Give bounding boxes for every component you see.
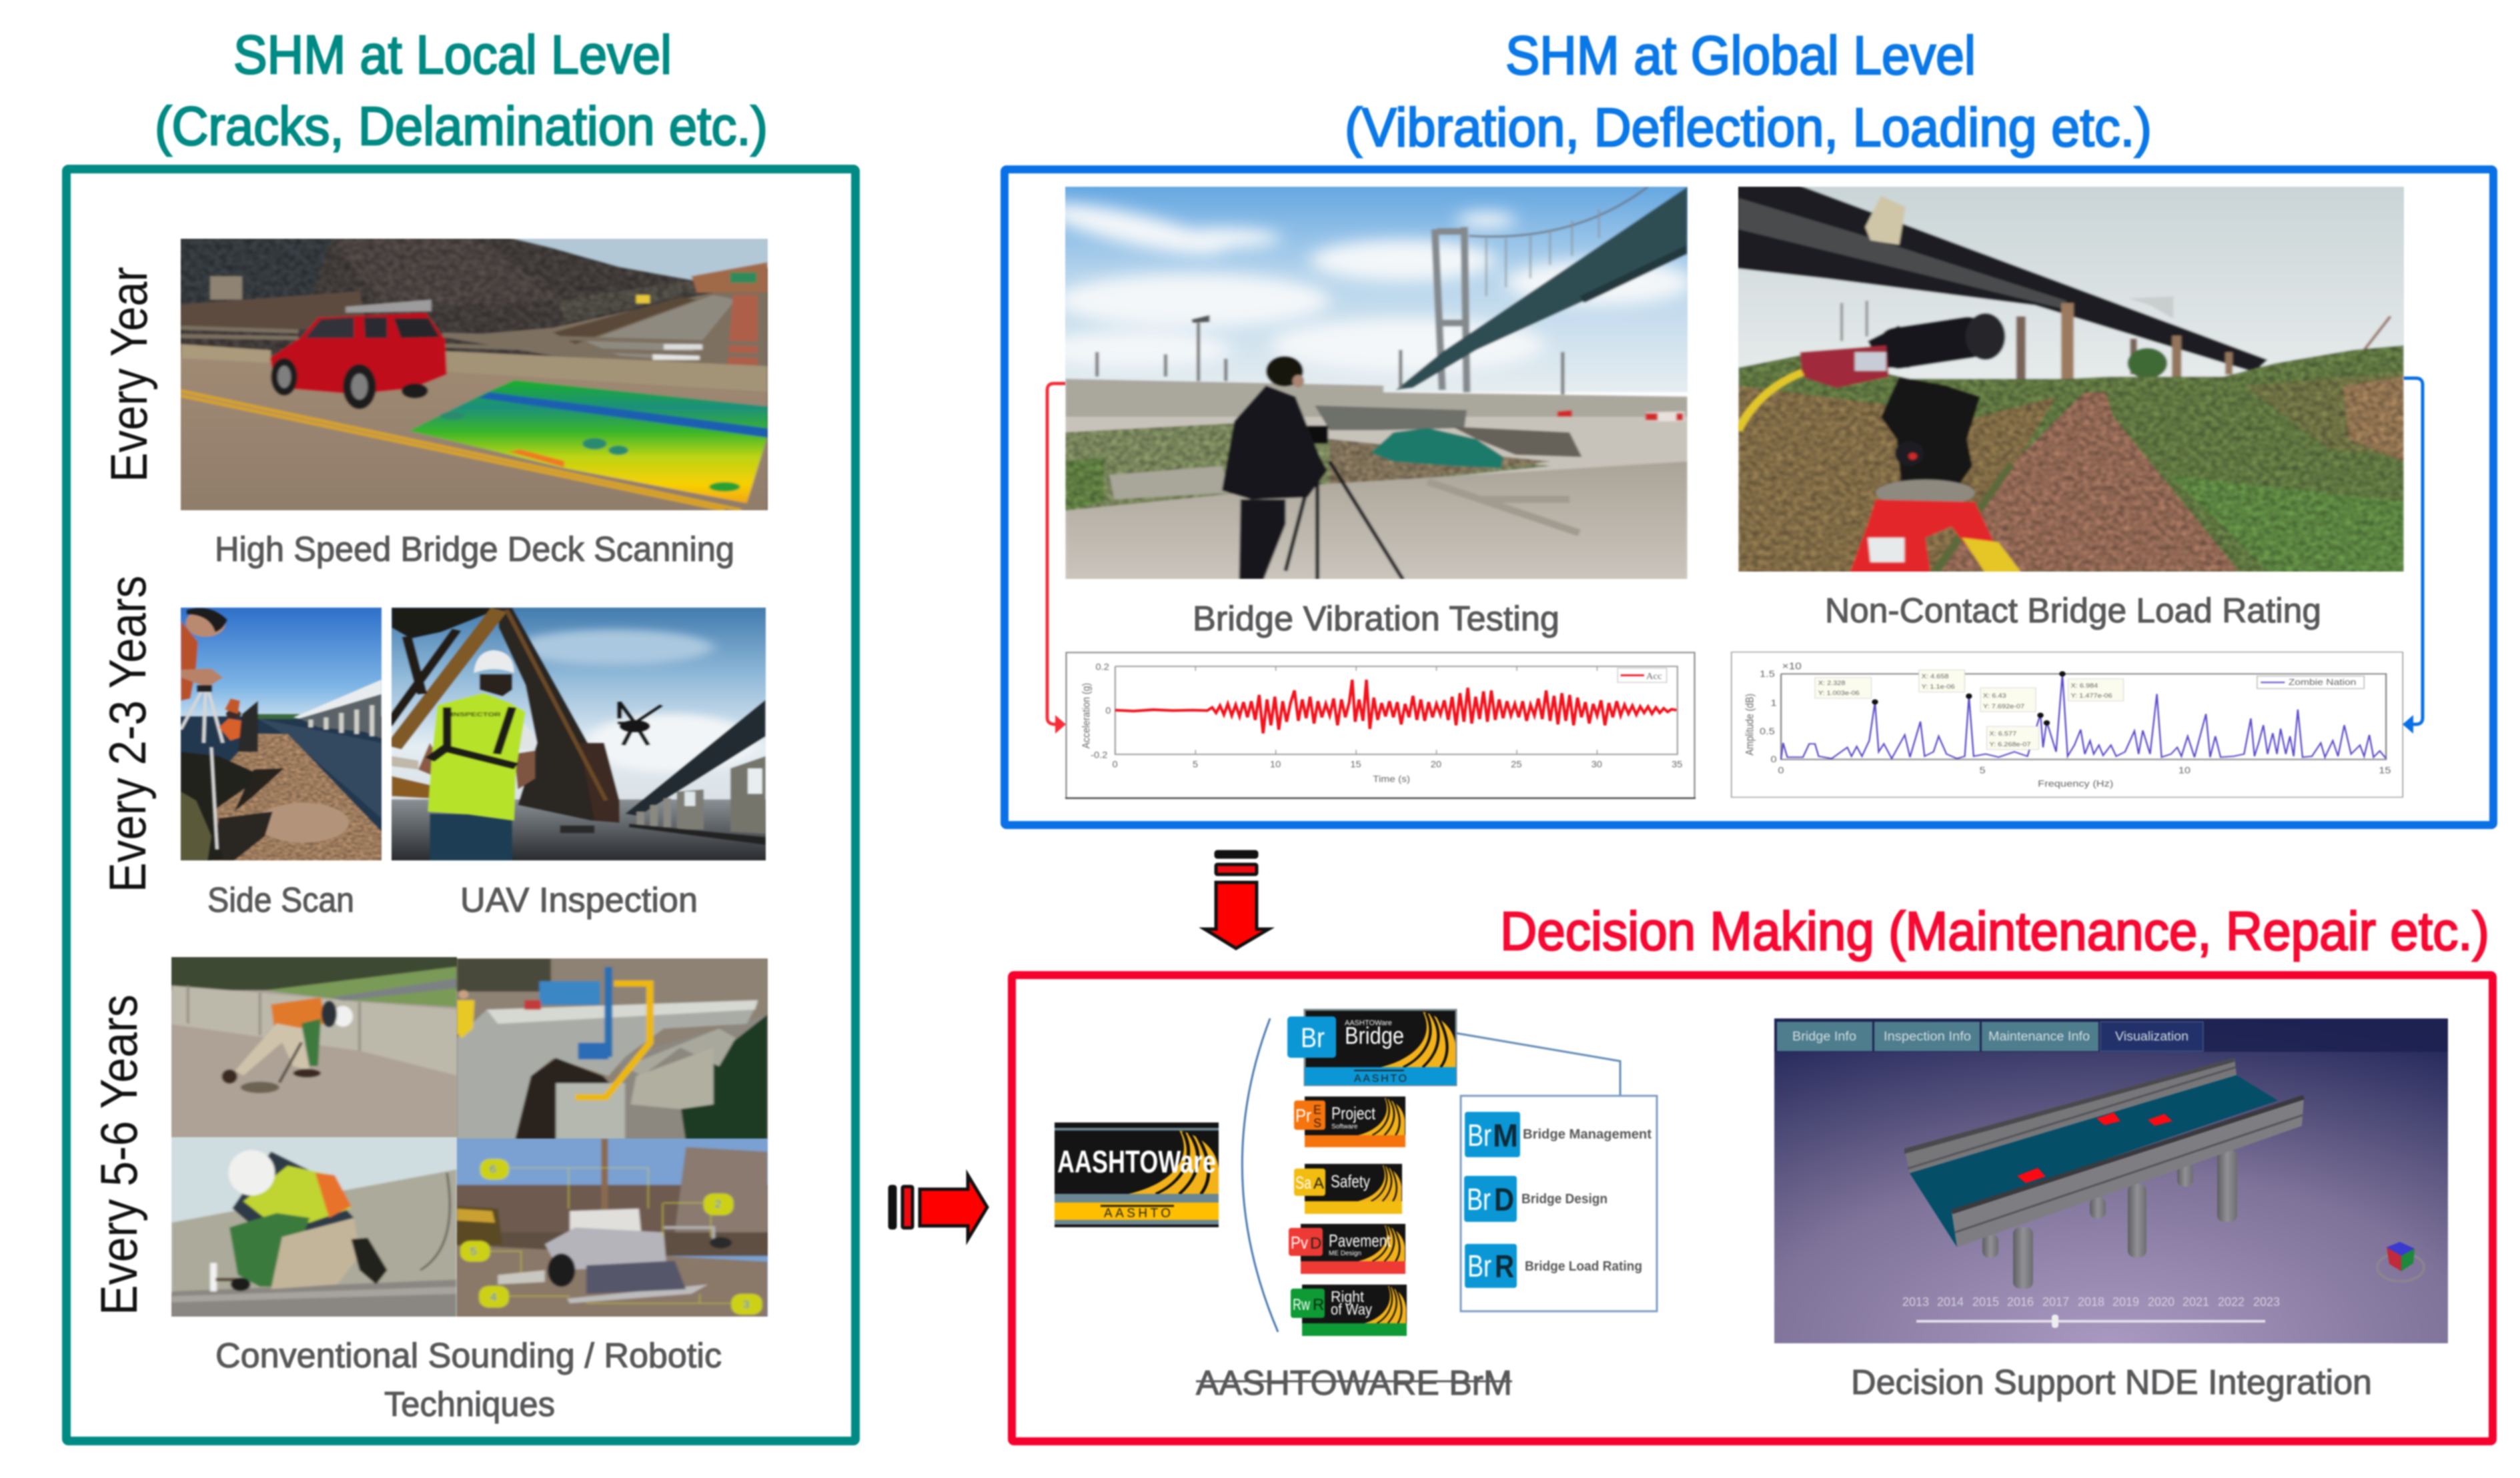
logo: Pavement ME Design: ME Design — [1329, 1250, 1361, 1257]
logo: AASHTOWare Bridge: Br — [1301, 1022, 1325, 1053]
logo: AASHTOWare — [1055, 1123, 1219, 1227]
caption: high speed bridge deck scanning: High Speed Bridge Deck Scanning — [215, 530, 734, 569]
chart: acceleration vs time — [1065, 651, 1697, 800]
chart: amplitude vs frequency: 0 — [1778, 765, 1784, 776]
chart: acceleration vs time: 20 — [1431, 759, 1441, 769]
chart: amplitude vs frequency: X: 2.328 — [1818, 680, 1846, 687]
photo: bridge under-deck inspection — [456, 957, 769, 1140]
tab bar — [1777, 1022, 2203, 1051]
logo: Right of Way: Rw — [1293, 1296, 1310, 1314]
module: Bridge Management — [1465, 1112, 1652, 1157]
logo: AASHTOWare Bridge: AASHTOWare — [1345, 1019, 1392, 1027]
year slider: 2016 — [2007, 1295, 2034, 1309]
tab bar: Bridge Info — [1792, 1030, 1856, 1044]
photo: sounding worker standing — [170, 956, 458, 1138]
year slider: 2021 — [2182, 1295, 2209, 1309]
module: Bridge Management: M — [1493, 1119, 1518, 1154]
chart: amplitude vs frequency: 1 — [1770, 698, 1777, 708]
logo: Project Estimator: Software — [1331, 1123, 1358, 1131]
logo: Project Estimator: S — [1313, 1117, 1321, 1130]
tab bar: Visualization — [2115, 1030, 2188, 1044]
caption: non-contact bridge load rating: Non-Contact Bridge Load Rating — [1825, 592, 2321, 630]
photo: high speed bridge deck scanning — [179, 237, 769, 512]
chart: acceleration vs time: -0.2 — [1091, 750, 1108, 760]
logo: Safety Analyst — [1294, 1164, 1402, 1214]
bridge 3D model — [1904, 1058, 2304, 1289]
chart: amplitude vs frequency: 10 — [2178, 765, 2190, 776]
caption: conventional sounding / robotic techniques: Techniques — [384, 1385, 555, 1424]
chart: acceleration vs time: 0.2 — [1096, 662, 1109, 672]
heading: SHM at Global Level: SHM at Global Level — [1505, 25, 1976, 86]
photo: robotic NDE platform: 6 — [490, 1163, 496, 1175]
module: Bridge Load Rating: Br — [1467, 1249, 1491, 1283]
logo: Right of Way: of Way — [1331, 1301, 1372, 1318]
caption: conventional sounding / robotic techniques: Conventional Sounding / Robotic — [215, 1337, 722, 1375]
module: Bridge Load Rating: Bridge Load Rating — [1525, 1259, 1642, 1274]
photo: robotic NDE platform: 2 — [714, 1199, 722, 1210]
logo: Pavement ME Design: Pavement — [1329, 1231, 1391, 1251]
year slider — [1902, 1295, 2280, 1328]
year slider: 2014 — [1937, 1295, 1964, 1309]
logo: AASHTOWare: AASHTOWare — [1057, 1144, 1216, 1179]
heading: SHM at Global Level: (Vibration, Deflection, Loading etc.) — [1345, 97, 2152, 158]
connector: Bridge to modules — [1456, 1033, 1620, 1096]
chart: acceleration vs time: 10 — [1270, 759, 1281, 769]
chart: acceleration vs time: Acceleration (g) — [1081, 683, 1093, 748]
photo: robotic NDE platform: 4 — [490, 1291, 497, 1303]
chart: acceleration vs time: 35 — [1672, 759, 1683, 769]
chart: amplitude vs frequency: Y: 1.1e-06 — [1922, 684, 1955, 690]
panel: decision making — [1012, 975, 2493, 1441]
label: Every Year: Every Year — [99, 267, 158, 482]
year slider: 2018 — [2078, 1295, 2104, 1309]
chart: amplitude vs frequency: Y: 1.477e-06 — [2070, 692, 2112, 700]
logo: Safety Analyst: Sa — [1295, 1173, 1311, 1193]
logo: Project Estimator — [1294, 1096, 1405, 1147]
logo: Safety Analyst: Safety — [1331, 1171, 1370, 1191]
heading: SHM at Local Level: (Cracks, Delamination etc.) — [155, 96, 768, 157]
chart: acceleration vs time: 0 — [1112, 759, 1118, 769]
logo: Pavement ME Design — [1289, 1224, 1405, 1274]
chart: acceleration vs time: 30 — [1592, 759, 1602, 769]
chart: acceleration vs time: 5 — [1193, 759, 1198, 769]
photo: UAV inspection — [390, 606, 767, 862]
year slider: 2020 — [2148, 1295, 2174, 1309]
module: Bridge Load Rating — [1465, 1244, 1642, 1288]
tab bar: Inspection Info — [1884, 1030, 1971, 1044]
module: Bridge Design: Bridge Design — [1521, 1192, 1608, 1207]
logo: AASHTOWare Bridge: AASHTO — [1354, 1073, 1407, 1084]
tab bar: Maintenance Info — [1988, 1030, 2090, 1044]
chart: amplitude vs frequency — [1730, 651, 2404, 799]
chart: acceleration vs time: 15 — [1350, 759, 1361, 769]
photo: robotic NDE platform: 5 — [470, 1246, 477, 1257]
photo: bridge vibration testing — [1065, 185, 1689, 580]
chart: amplitude vs frequency: ×10 — [1782, 662, 1802, 672]
arrow: red connector from photo to acceleration chart — [1047, 384, 1066, 734]
panel: local level — [67, 169, 855, 1441]
arrow: down from global level to decision making — [1205, 852, 1269, 948]
year slider: 2017 — [2042, 1295, 2069, 1309]
heading: SHM at Global Level — [1345, 25, 2152, 158]
chart: amplitude vs frequency: 5 — [1980, 765, 1986, 776]
chart: acceleration vs time: 0 — [1105, 706, 1111, 716]
module: Bridge Management: Br — [1467, 1118, 1491, 1153]
chart: acceleration vs time: Acc — [1646, 671, 1662, 682]
chart: amplitude vs frequency: Amplitude (dB) — [1744, 694, 1756, 756]
module: Bridge Load Rating: R — [1495, 1249, 1514, 1285]
orientation cube — [2377, 1242, 2424, 1281]
label: Every 5-6 Years: Every 5-6 Years — [89, 994, 148, 1315]
logo: AASHTOWare: AASHTO — [1104, 1207, 1171, 1221]
year slider: 2013 — [1902, 1295, 1929, 1309]
chart: amplitude vs frequency: X: 6.577 — [1989, 731, 2017, 738]
logo: Right of Way — [1291, 1285, 1407, 1336]
chart: amplitude vs frequency: X: 6.43 — [1983, 692, 2006, 700]
label: Every 2-3 Years: Every 2-3 Years — [98, 576, 157, 892]
chart: amplitude vs frequency: Y: 6.268e-07 — [1989, 742, 2031, 748]
logo: Pavement ME Design: D — [1310, 1235, 1321, 1253]
box: BrM modules — [1461, 1096, 1657, 1311]
chart: amplitude vs frequency: Zombie Nation — [2289, 678, 2356, 688]
year slider: 2022 — [2218, 1295, 2245, 1309]
caption: conventional sounding / robotic techniques — [215, 1337, 722, 1424]
chart: acceleration vs time: Time (s) — [1373, 774, 1410, 784]
bracket curve — [1242, 1018, 1278, 1332]
year slider: 2015 — [1972, 1295, 1999, 1309]
chart: amplitude vs frequency: Y: 1.003e-06 — [1818, 690, 1860, 697]
logo: Right of Way: Right — [1331, 1288, 1365, 1305]
logo: AASHTOWare Bridge: Bridge — [1345, 1022, 1404, 1049]
chart: amplitude vs frequency: 15 — [2379, 765, 2391, 776]
chart: amplitude vs frequency: X: 6.984 — [2070, 683, 2098, 690]
photo: non-contact bridge load rating — [1737, 185, 2405, 573]
caption: side scan: Side Scan — [207, 881, 354, 920]
chart: amplitude vs frequency: 1.5 — [1760, 669, 1775, 680]
caption: bridge vibration testing: Bridge Vibration Testing — [1193, 600, 1559, 638]
chart: amplitude vs frequency: X: 4.658 — [1922, 674, 1949, 680]
caption: UAV inspection: UAV Inspection — [460, 881, 698, 920]
chart: acceleration vs time: 25 — [1511, 759, 1522, 769]
panel: global level — [1005, 169, 2493, 825]
module: Bridge Design — [1464, 1176, 1608, 1222]
year slider: 2019 — [2112, 1295, 2139, 1309]
module: Bridge Design: D — [1494, 1183, 1514, 1218]
arrow: local level into AASHTOWare — [890, 1175, 987, 1239]
module: Bridge Design: Br — [1467, 1182, 1491, 1217]
chart: amplitude vs frequency: Frequency (Hz) — [2038, 778, 2113, 789]
module: Bridge Management: Bridge Management — [1523, 1127, 1652, 1142]
photo: robotic NDE platform: 3 — [743, 1299, 750, 1311]
chart: amplitude vs frequency: 0.5 — [1760, 726, 1775, 737]
arrow: blue connector from photo to amplitude chart — [2403, 378, 2423, 734]
logo: Right of Way: R — [1313, 1296, 1324, 1314]
year slider: 2023 — [2253, 1295, 2280, 1309]
heading: SHM at Local Level: SHM at Local Level — [233, 25, 672, 85]
photo: hammer sounding worker kneeling — [171, 1137, 458, 1318]
photo: side scan — [179, 606, 383, 862]
logo: AASHTOWare Bridge — [1287, 1010, 1456, 1085]
heading: SHM at Local Level — [155, 25, 768, 157]
screenshot: decision support visualization — [1774, 1018, 2448, 1343]
photo: UAV inspection: INSPECTOR — [451, 711, 501, 718]
logo: Project Estimator: Project — [1331, 1103, 1376, 1123]
chart: amplitude vs frequency: Y: 7.692e-07 — [1983, 703, 2024, 710]
logo: Project Estimator: Pr — [1295, 1105, 1311, 1126]
logo: Pavement ME Design: Pv — [1291, 1233, 1308, 1253]
caption: AASHTOWARE BrM: AASHTOWARE BrM — [1196, 1364, 1512, 1403]
photo: robotic NDE platform — [456, 1138, 769, 1318]
chart: amplitude vs frequency: 0 — [1770, 754, 1777, 765]
logo: Safety Analyst: A — [1313, 1175, 1324, 1193]
caption: decision support NDE integration: Decision Support NDE Integration — [1851, 1363, 2372, 1402]
logo: Project Estimator: E — [1313, 1103, 1321, 1117]
